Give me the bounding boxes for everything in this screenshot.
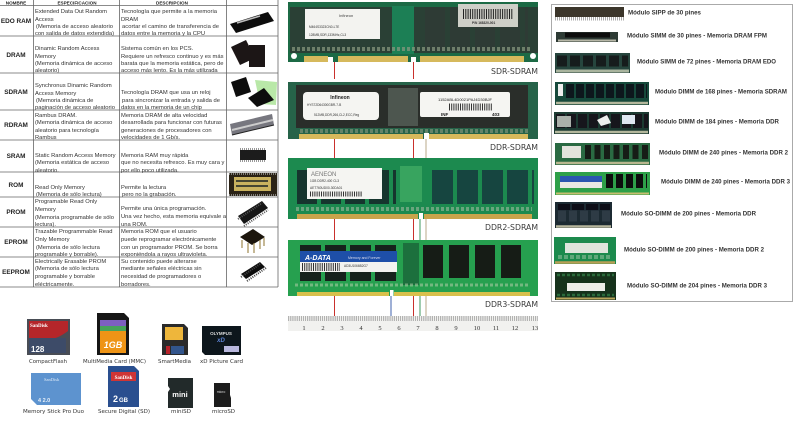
card: xD Picture Card [200, 326, 243, 365]
row: EEPROM: Electrically Erasable PROM [35, 259, 106, 265]
row: ROM: pero no la grabación. [122, 192, 177, 198]
row: EDO RAM: (Memoria de acceso aleatorio [36, 24, 113, 30]
row: RDRAM: Memoria DRAM de alta velocidad [121, 113, 207, 119]
row: RDRAM: desarrollada para funcionar con futuras [121, 120, 222, 126]
panel: memory cards [23, 313, 243, 415]
module row: DIMM 240 DDR2 [555, 143, 788, 165]
card: MultiMedia Card: 1GB [104, 340, 123, 350]
row: PROM: Permite una única programación. [121, 206, 207, 212]
row: RDRAM: (Memoria dinámica de acceso [35, 120, 112, 126]
module: SDR-SDRAM: M464S3323CN0-L7E [309, 25, 339, 29]
module row: DIMM 168: Módulo DIMM de 168 pines - Memoria SDRAM [655, 88, 787, 96]
row: SDRAM: SDRAM [4, 89, 28, 96]
row: SDRAM: Access Memory [35, 91, 76, 97]
row: RDRAM: Rambus DRAM. [35, 113, 77, 119]
module: DDR-SDRAM: Infineon [330, 95, 350, 101]
module row: DIMM 168 [555, 82, 787, 105]
module: SDR-SDRAM: 128MB,SDR,133MHz,CL3 [309, 33, 346, 37]
row: PROM: lectura). [35, 222, 56, 228]
row: SRAM [7, 149, 266, 174]
row: EPROM: con un programador PROM. Se borra [121, 245, 218, 251]
card: miniSD: mini [172, 390, 188, 399]
module: SDR-SDRAM: P/N 168320-001 [472, 21, 495, 25]
card: xD Picture Card: xD [216, 338, 226, 344]
card: xD Picture Card: OLYMPUS [210, 331, 232, 336]
module row: SO-DIMM 204 DDR3 [555, 272, 767, 300]
row: SDRAM: para sincronizar la entrada y salida de [122, 98, 220, 104]
card: Memory Stick Pro Duo: SanDisk [44, 377, 60, 382]
module row: SIMM 72 [555, 53, 776, 73]
row: SDRAM: paginación de acceso aleatorio [35, 105, 115, 111]
row: EPROM: Memoria ROM que el usuario [121, 229, 197, 235]
module row: SIMM 30 [556, 32, 767, 42]
row: PROM: (Memoria programable de sólo [35, 215, 114, 221]
row: RDRAM: aleatorio para tecnología [35, 128, 100, 134]
module row: SO-DIMM 200 DDR [555, 202, 756, 228]
card: CompactFlash: CompactFlash [29, 359, 67, 365]
module: DDR-SDRAM: INF [441, 112, 448, 117]
row: EPROM: exponiéndola a rayos ultravioleta. [121, 252, 208, 258]
module: DDR3-SDRAM: Memory and Forever [348, 256, 381, 260]
panel: SDRAM generations comparison [288, 2, 538, 332]
ruler: 8 [435, 325, 439, 332]
row: SRAM: Memoria RAM muy rápida [121, 153, 189, 159]
module: DDR3-SDRAM: AD3U1066B2G7 [344, 264, 368, 268]
row: EEPROM: eléctricamente. [35, 282, 75, 288]
row: RDRAM: velocidades de 1 Gb/s. [121, 135, 180, 141]
card: SmartMedia [158, 324, 191, 365]
row: DRAM: Sistema común en los PCS. [121, 46, 194, 52]
module: DDR-SDRAM: HYS72D64300GBR-7-B [307, 103, 341, 107]
module row: DIMM 184: Módulo DIMM de 184 pines - Memoria DDR [655, 118, 779, 126]
row: ROM: Read Only Memory [35, 185, 85, 191]
row: DRAM: DRAM [6, 52, 26, 59]
card: MultiMedia Card [83, 313, 146, 365]
module row: SO-DIMM 200 DDR2 [554, 237, 764, 264]
card: Secure Digital: Secure Digital (SD) [98, 409, 150, 415]
row: DRAM: Requiere un refresco continuo y es más [121, 54, 224, 60]
row: EEPROM: necesidad de programadores o [121, 274, 201, 280]
row: EPROM: Trazable Programmable Read [35, 229, 112, 235]
card: xD Picture Card: xD Picture Card [200, 359, 243, 365]
module row: DIMM 184 [554, 112, 779, 134]
label: DDR2-SDRAM: DDR2-SDRAM [485, 223, 538, 232]
table header: ESPECIFICACION [57, 0, 97, 6]
row: DRAM: Dinamic Random Access [35, 46, 100, 52]
card: CompactFlash [27, 319, 70, 365]
card: Memory Stick Pro Duo: Memory Stick Pro Duo [23, 409, 84, 415]
row: SDRAM: Synchronus Dinamic Random [35, 83, 112, 89]
ruler: 6 [397, 325, 401, 332]
row: DRAM: (Memoria dinámica de acceso [35, 61, 112, 67]
row: SRAM: aleatorio. [35, 168, 59, 174]
row: EDO RAM: EDO RAM [1, 18, 31, 25]
module: DDR2-SDRAM: AENEON [311, 172, 336, 178]
module row: DIMM 240 DDR2: Módulo DIMM de 240 pines - Memoria DDR 2 [659, 150, 788, 156]
row: EPROM: EPROM [4, 239, 28, 246]
card: CompactFlash: 128 [31, 345, 45, 354]
panel: memory types table [0, 0, 278, 288]
ruler: 2 [321, 325, 325, 332]
ruler: 4 [359, 325, 363, 332]
card: CompactFlash: SanDisk [30, 324, 48, 329]
module row: SO-DIMM 200 DDR: Módulo SO-DIMM de 200 pines - Memoria DDR [621, 210, 756, 218]
row: ROM: (Memoria de sólo lectura) [36, 192, 102, 198]
module: DDR-SDRAM [288, 82, 538, 140]
module row: SIMM 30: Módulo SIMM de 30 pines - Memoria DRAM FPM [627, 32, 767, 40]
module: DDR-SDRAM: 1152ABL4D0021PAJ4D30BJF [438, 97, 492, 102]
row: EEPROM: mediante señales eléctricas sin [121, 266, 202, 272]
row: PROM: Una vez hecho, esta memoria equivale a [121, 214, 227, 220]
row: EPROM: (Memoria de sólo lectura [36, 245, 101, 251]
ruler: 1 [302, 325, 306, 332]
module row: SO-DIMM 204 DDR3: Módulo SO-DIMM de 204 pines - Memoria DDR 3 [627, 282, 767, 290]
module row: DIMM 240 DDR3 [555, 172, 790, 195]
row: ROM: Permite la lectura [121, 185, 167, 191]
row: PROM: Programable Read Only [35, 199, 97, 205]
row: SDRAM: (Memoria dinámica de [36, 98, 93, 104]
table header: NOMBRE [6, 0, 26, 6]
ruler: 7 [416, 325, 420, 332]
label: DDR3-SDRAM: DDR3-SDRAM [485, 300, 538, 309]
module: DDR2-SDRAM [288, 158, 538, 220]
module: DDR3-SDRAM [288, 240, 538, 297]
ruler: 10 [474, 325, 480, 332]
module row: SIPP 30: Módulo SIPP de 30 pines [628, 10, 701, 16]
panel: module types [552, 4, 792, 302]
row: RDRAM [4, 113, 274, 141]
row: SDRAM [4, 77, 277, 111]
row: SRAM: que no necesita refresco. Es muy cara y [121, 160, 225, 166]
row: EDO RAM: Access [35, 17, 54, 23]
row: SRAM: Static Random Access Memory [35, 153, 116, 159]
row: DRAM [6, 40, 265, 74]
row: EEPROM: Su contenido puede alterarse [121, 259, 197, 265]
module: DDR-SDRAM: 403 [492, 112, 500, 117]
row: EEPROM: (Memoria de sólo lectura [35, 266, 100, 272]
row: PROM: Memory [35, 207, 56, 213]
row: PROM [6, 199, 268, 228]
ruler [288, 316, 538, 332]
row: SDRAM: Tecnología DRAM que usa un reloj [121, 90, 211, 96]
row: EDO RAM: datos entre la memoria y la CPU [121, 31, 205, 37]
row: DRAM: Memory [35, 54, 56, 60]
ruler: 9 [454, 325, 458, 332]
card: Secure Digital [98, 366, 150, 415]
card: miniSD [168, 378, 193, 415]
card: microSD: micro [217, 390, 225, 394]
module: DDR2-SDRAM: 1GB DDR2-400 CL3 [310, 179, 339, 183]
row: EEPROM: borradores. [121, 282, 151, 288]
card: Secure Digital: GB [119, 398, 129, 404]
row: ROM: ROM [9, 182, 23, 189]
row: DRAM: barata que la memoria estática, pero de [121, 61, 223, 67]
card: microSD: microSD [212, 409, 235, 415]
card: Memory Stick Pro Duo [23, 373, 84, 415]
row: SRAM: por ello poco utilizada. [121, 168, 179, 174]
card: miniSD: miniSD [171, 409, 191, 415]
module: SDR-SDRAM [288, 2, 538, 63]
card: Secure Digital: SanDisk [115, 376, 133, 381]
row: PROM: PROM [6, 209, 26, 216]
row: SRAM: (Memoria estática de acceso [35, 160, 109, 166]
row: DRAM: aleatorio) [35, 68, 59, 74]
label: DDR-SDRAM: DDR-SDRAM [490, 143, 538, 152]
card: Secure Digital: 2 [113, 394, 118, 404]
row: EEPROM [2, 259, 266, 288]
row: EPROM [4, 229, 265, 258]
row: EDO RAM: Extended Data Out Random [35, 9, 107, 15]
row: SRAM: SRAM [7, 153, 25, 160]
row: EDO RAM: acortar el camino de transferencia de [122, 24, 219, 30]
card: Memory Stick Pro Duo: 4 2.0 [38, 398, 50, 404]
row: ROM [9, 173, 277, 198]
card: microSD [212, 383, 235, 415]
row: EDO RAM [1, 9, 274, 37]
row: EDO RAM: con salida de datos extendida) [35, 31, 114, 37]
row: SDRAM: datos en la memoria de un chip [121, 105, 202, 111]
row: RDRAM: generaciones de procesadores con [121, 128, 212, 134]
row: EEPROM: EEPROM [2, 269, 30, 276]
module: DDR3-SDRAM: A-DATA [304, 255, 331, 262]
table header: DESCRIPCION [156, 0, 189, 6]
ruler: 5 [378, 325, 382, 332]
card: MultiMedia Card: MultiMedia Card (MMC) [83, 359, 146, 365]
row: RDRAM: RDRAM [4, 122, 28, 129]
row: EPROM: programable y borrable). [35, 252, 99, 258]
card: SmartMedia: SmartMedia [158, 359, 191, 365]
slot alignment lines [334, 62, 426, 316]
row: EPROM: puede reprogramar electrónicamente [121, 237, 216, 243]
module: DDR2-SDRAM: AET760UD00-30DA01 [310, 186, 342, 190]
ruler: 3 [340, 325, 344, 332]
row: EPROM: Only Memory [35, 237, 70, 243]
module row: SO-DIMM 200 DDR2: Módulo SO-DIMM de 200 pines - Memoria DDR 2 [624, 246, 764, 254]
row: EEPROM: programable y borrable [35, 274, 95, 280]
module row: DIMM 240 DDR3: Módulo DIMM de 240 pines - Memoria DDR 3 [661, 178, 790, 186]
ruler: 13 [532, 325, 538, 332]
table header [6, 0, 189, 6]
module row: SIMM 72: Módulo SIMM de 72 pines - Memoria DRAM EDO [637, 58, 776, 66]
row: PROM: una ROM. [121, 222, 148, 228]
row: EDO RAM: DRAM [121, 17, 138, 23]
ruler: 12 [512, 325, 518, 332]
ruler: 11 [493, 325, 499, 332]
row: EDO RAM: Tecnología que permite a la memoria [121, 9, 218, 15]
row: RDRAM: Rambus [35, 135, 57, 141]
module: SDR-SDRAM: Infineon [339, 13, 353, 18]
row: DRAM: acceso más lento. Es la más utilizada [121, 68, 218, 74]
module row: SIPP 30 [555, 7, 701, 20]
label: SDR-SDRAM: SDR-SDRAM [491, 67, 538, 76]
module: DDR-SDRAM: 512MB,DDR,266,CL2,ECC,Reg [314, 113, 359, 117]
